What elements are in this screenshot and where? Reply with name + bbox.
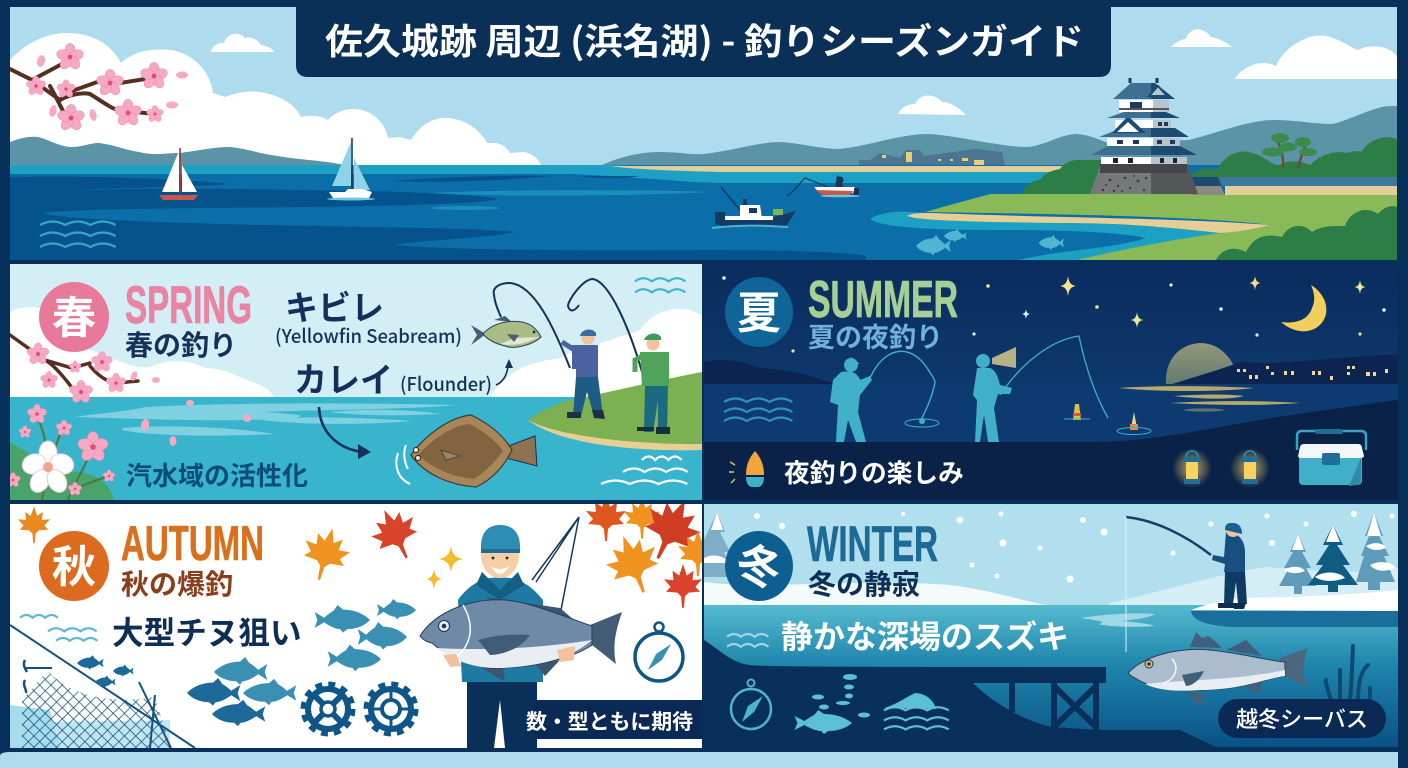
species: flounder: (Flounder) — [400, 370, 492, 397]
catch caption bar — [534, 700, 702, 739]
autumn leaves — [18, 488, 718, 608]
bobber icon — [729, 451, 764, 487]
seabass fish — [1128, 632, 1308, 708]
estuary caption: 汽水域の活性化 — [126, 456, 308, 493]
panel: hero lake scene — [10, 7, 1398, 260]
school of fish — [77, 599, 416, 726]
floating petals — [140, 400, 251, 446]
spring badge: 春 — [52, 282, 96, 346]
panel: autumn — [10, 488, 718, 748]
setting moon — [1166, 343, 1236, 386]
crescent moon — [1281, 285, 1326, 331]
spring clouds — [10, 307, 274, 397]
fisherman holding fish — [458, 517, 579, 748]
near shoreline — [704, 400, 1398, 500]
night angler left — [830, 351, 939, 442]
castle — [1090, 78, 1225, 195]
spring subheading: 春の釣り — [125, 324, 237, 364]
title banner — [296, 0, 1111, 77]
compass icon — [731, 680, 771, 729]
green shore and sand — [925, 194, 1398, 260]
snowflakes — [754, 511, 1394, 582]
sailboat red — [159, 148, 198, 200]
deep seabass caption: 静かな深場のスズキ — [781, 612, 1069, 658]
spring cherry branch — [10, 335, 160, 404]
summer waves — [724, 398, 792, 421]
town lights — [1237, 366, 1388, 380]
distant town — [859, 149, 1005, 166]
seaweed — [1326, 646, 1370, 700]
autumn subheading: 秋の爆釣 — [121, 563, 233, 603]
autumn badge: 秋 — [52, 531, 96, 595]
big chinu caption: 大型チヌ狙い — [112, 608, 302, 654]
panel: summer — [704, 264, 1398, 500]
far beach — [610, 166, 1085, 172]
summer heading: SUMMER — [808, 271, 958, 329]
spring badge — [39, 282, 109, 352]
panel: winter — [704, 504, 1398, 752]
summer subheading: 夏の夜釣り — [808, 316, 943, 355]
snowy trees — [704, 512, 1396, 594]
yellowfin seabream fish — [471, 316, 541, 347]
summer badge: 夏 — [737, 277, 781, 341]
night angler right with headlamp — [973, 336, 1108, 442]
anglers on shore — [494, 279, 670, 434]
title text: 佐久城跡 周辺 (浜名湖) - 釣りシーズンガイド — [325, 13, 1084, 65]
spring water — [10, 397, 702, 500]
catch caption: 数・型ともに期待 — [526, 706, 693, 736]
autumn waves — [20, 615, 97, 641]
overwintering pill — [1218, 699, 1386, 738]
species: yellowfin seabream: (Yellowfin Seabream) — [275, 322, 462, 349]
bottom strip — [0, 752, 1398, 768]
pine tree — [1262, 133, 1317, 168]
lake waves icon — [40, 222, 116, 247]
winter badge: 冬 — [729, 526, 791, 600]
large white cloud — [10, 33, 541, 170]
bobbers — [1064, 404, 1151, 434]
spring wave marks — [601, 278, 688, 484]
small fishing boat with angler — [787, 175, 860, 197]
winter snowy bank — [1191, 611, 1398, 627]
small clouds — [211, 29, 1397, 115]
night fishing caption: 夜釣りの楽しみ — [784, 453, 964, 490]
winter seabed and pier — [704, 640, 1398, 752]
winter waves — [727, 634, 768, 647]
autumn heading: AUTUMN — [121, 517, 264, 571]
summer hills — [704, 360, 834, 384]
cooler box — [1297, 429, 1366, 486]
sailboat white — [327, 138, 375, 200]
summer badge — [725, 277, 793, 347]
lake water — [10, 165, 1310, 260]
curved arrow — [319, 407, 371, 459]
overwintering pill: 越冬シーバス — [1236, 702, 1368, 734]
winter subheading: 冬の静寂 — [808, 563, 920, 603]
autumn net — [10, 625, 195, 748]
small arrow — [496, 359, 513, 385]
fish silhouettes in shallows — [916, 229, 1064, 255]
distant mountains — [10, 137, 345, 165]
compass — [635, 622, 683, 681]
winter heading: WINTER — [807, 516, 938, 572]
winter angler — [1126, 517, 1247, 652]
moon reflection — [1118, 386, 1300, 412]
ship wheels — [303, 684, 416, 734]
cherry branch — [10, 43, 188, 132]
rock over waves icon — [884, 693, 949, 729]
chinu fish — [420, 597, 622, 682]
species: karei: カレイ — [294, 353, 393, 402]
sparkles — [426, 546, 464, 589]
fish and bubbles icon — [795, 674, 870, 734]
snow hills — [1110, 567, 1398, 606]
far shore band — [1218, 177, 1397, 186]
autumn badge — [39, 531, 109, 601]
winter water — [704, 605, 1398, 752]
spring shore — [528, 420, 702, 450]
shallow water — [870, 212, 1240, 260]
spring blossom bush — [5, 404, 116, 500]
species: kibire: キビレ — [285, 281, 384, 330]
flounder fish — [396, 415, 537, 487]
panel: spring — [5, 264, 702, 500]
tree lines — [1021, 137, 1398, 260]
fishing boat — [712, 187, 796, 228]
spring heading: SPRING — [125, 276, 252, 335]
lanterns — [1172, 448, 1270, 488]
stars — [791, 276, 1366, 353]
